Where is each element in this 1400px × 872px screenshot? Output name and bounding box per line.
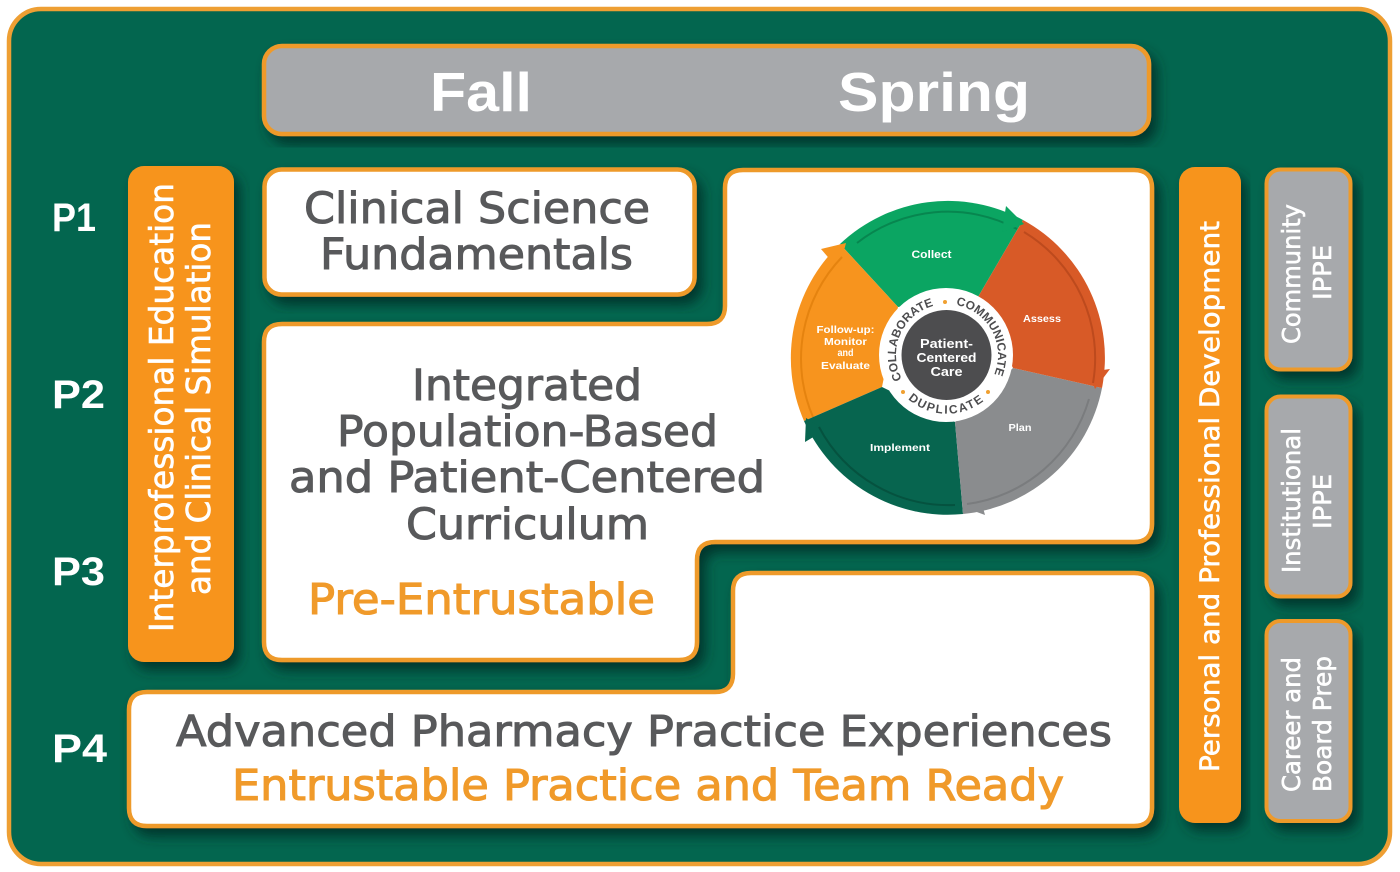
panel: integrated curriculum: Population-Based [337,407,718,457]
panel: career and board prep: Career and [1277,657,1306,792]
segment: follow-up: Monitor [824,337,867,348]
center ring: collaborate communicate duplicate: COLLABORATE [888,298,933,381]
panel: institutional ippe: Institutional [1277,428,1306,573]
year labels P1 to P4: P2 [52,373,105,417]
panel: institutional ippe [1266,396,1350,596]
panel: community ippe: Community [1277,204,1306,344]
year labels P1 to P4: P3 [52,550,105,594]
season bar: fall and spring: Spring [838,61,1030,123]
year labels P1 to P4: P4 [52,727,108,771]
segment: plan: Plan [1008,422,1032,434]
segment: collect: Collect [912,249,952,261]
segment: collect [840,201,1023,307]
segment: assess [978,220,1110,389]
center ring: collaborate communicate duplicate: DUPLICATE [908,393,984,414]
year labels P1 to P4 [52,196,108,771]
panel: community ippe [1266,170,1350,370]
segment: follow-up: Evaluate [821,361,871,372]
panel: clinical science fundamentals: Clinical Science [304,184,650,234]
chart: patient care process wheel [790,200,1110,515]
segment: plan [955,368,1102,515]
panel: personal and professional development [1179,167,1241,823]
center: patient-centered care: Centered [916,350,977,365]
segment: follow-up: Follow-up: [816,325,874,336]
panel: advanced pharmacy practice experiences: Advanced Pharmacy Practice Experiences [176,707,1112,757]
panel: clinical science fundamentals [264,170,694,294]
panel: interprofessional education [128,166,234,662]
panel: integrated curriculum [264,170,1152,660]
panel: career and board prep [1266,621,1350,821]
panel: interprofessional education: Interprofessional Education [142,183,181,632]
entrustable practice label: Entrustable Practice and Team Ready [232,761,1064,811]
year labels P1 to P4: P1 [52,196,96,240]
panel: career and board prep: Board Prep [1308,656,1337,792]
center ring: collaborate communicate duplicate [879,288,1013,422]
panel: interprofessional education: and Clinical Simulation [179,222,218,595]
center ring: collaborate communicate duplicate: COMMUNICATE [957,298,1006,376]
center: patient-centered care: Patient- [920,336,973,351]
panel: personal and professional development: Personal and Professional Development [1195,221,1226,772]
segment: assess: Assess [1023,313,1061,325]
season bar: fall and spring [264,46,1149,134]
panel: community ippe: IPPE [1308,245,1337,300]
panel: institutional ippe: IPPE [1308,474,1337,529]
segment: follow-up [791,243,898,421]
season bar: fall and spring: Fall [430,61,532,123]
panel: integrated curriculum: Integrated [412,361,642,411]
panel: integrated curriculum: and Patient-Centered [289,453,765,503]
segment: implement: Implement [870,442,931,454]
pre-entrustable label: Pre-Entrustable [308,575,655,625]
segment: implement [804,387,963,515]
arrow: collect to assess [1002,206,1024,232]
panel: clinical science fundamentals: Fundamentals [320,230,633,280]
panel: advanced pharmacy practice experiences [129,573,1152,826]
center: patient-centered care [902,310,992,400]
segment: follow-up: and [838,348,854,359]
center: patient-centered care: Care [930,364,962,379]
panel: integrated curriculum: Curriculum [406,500,649,550]
